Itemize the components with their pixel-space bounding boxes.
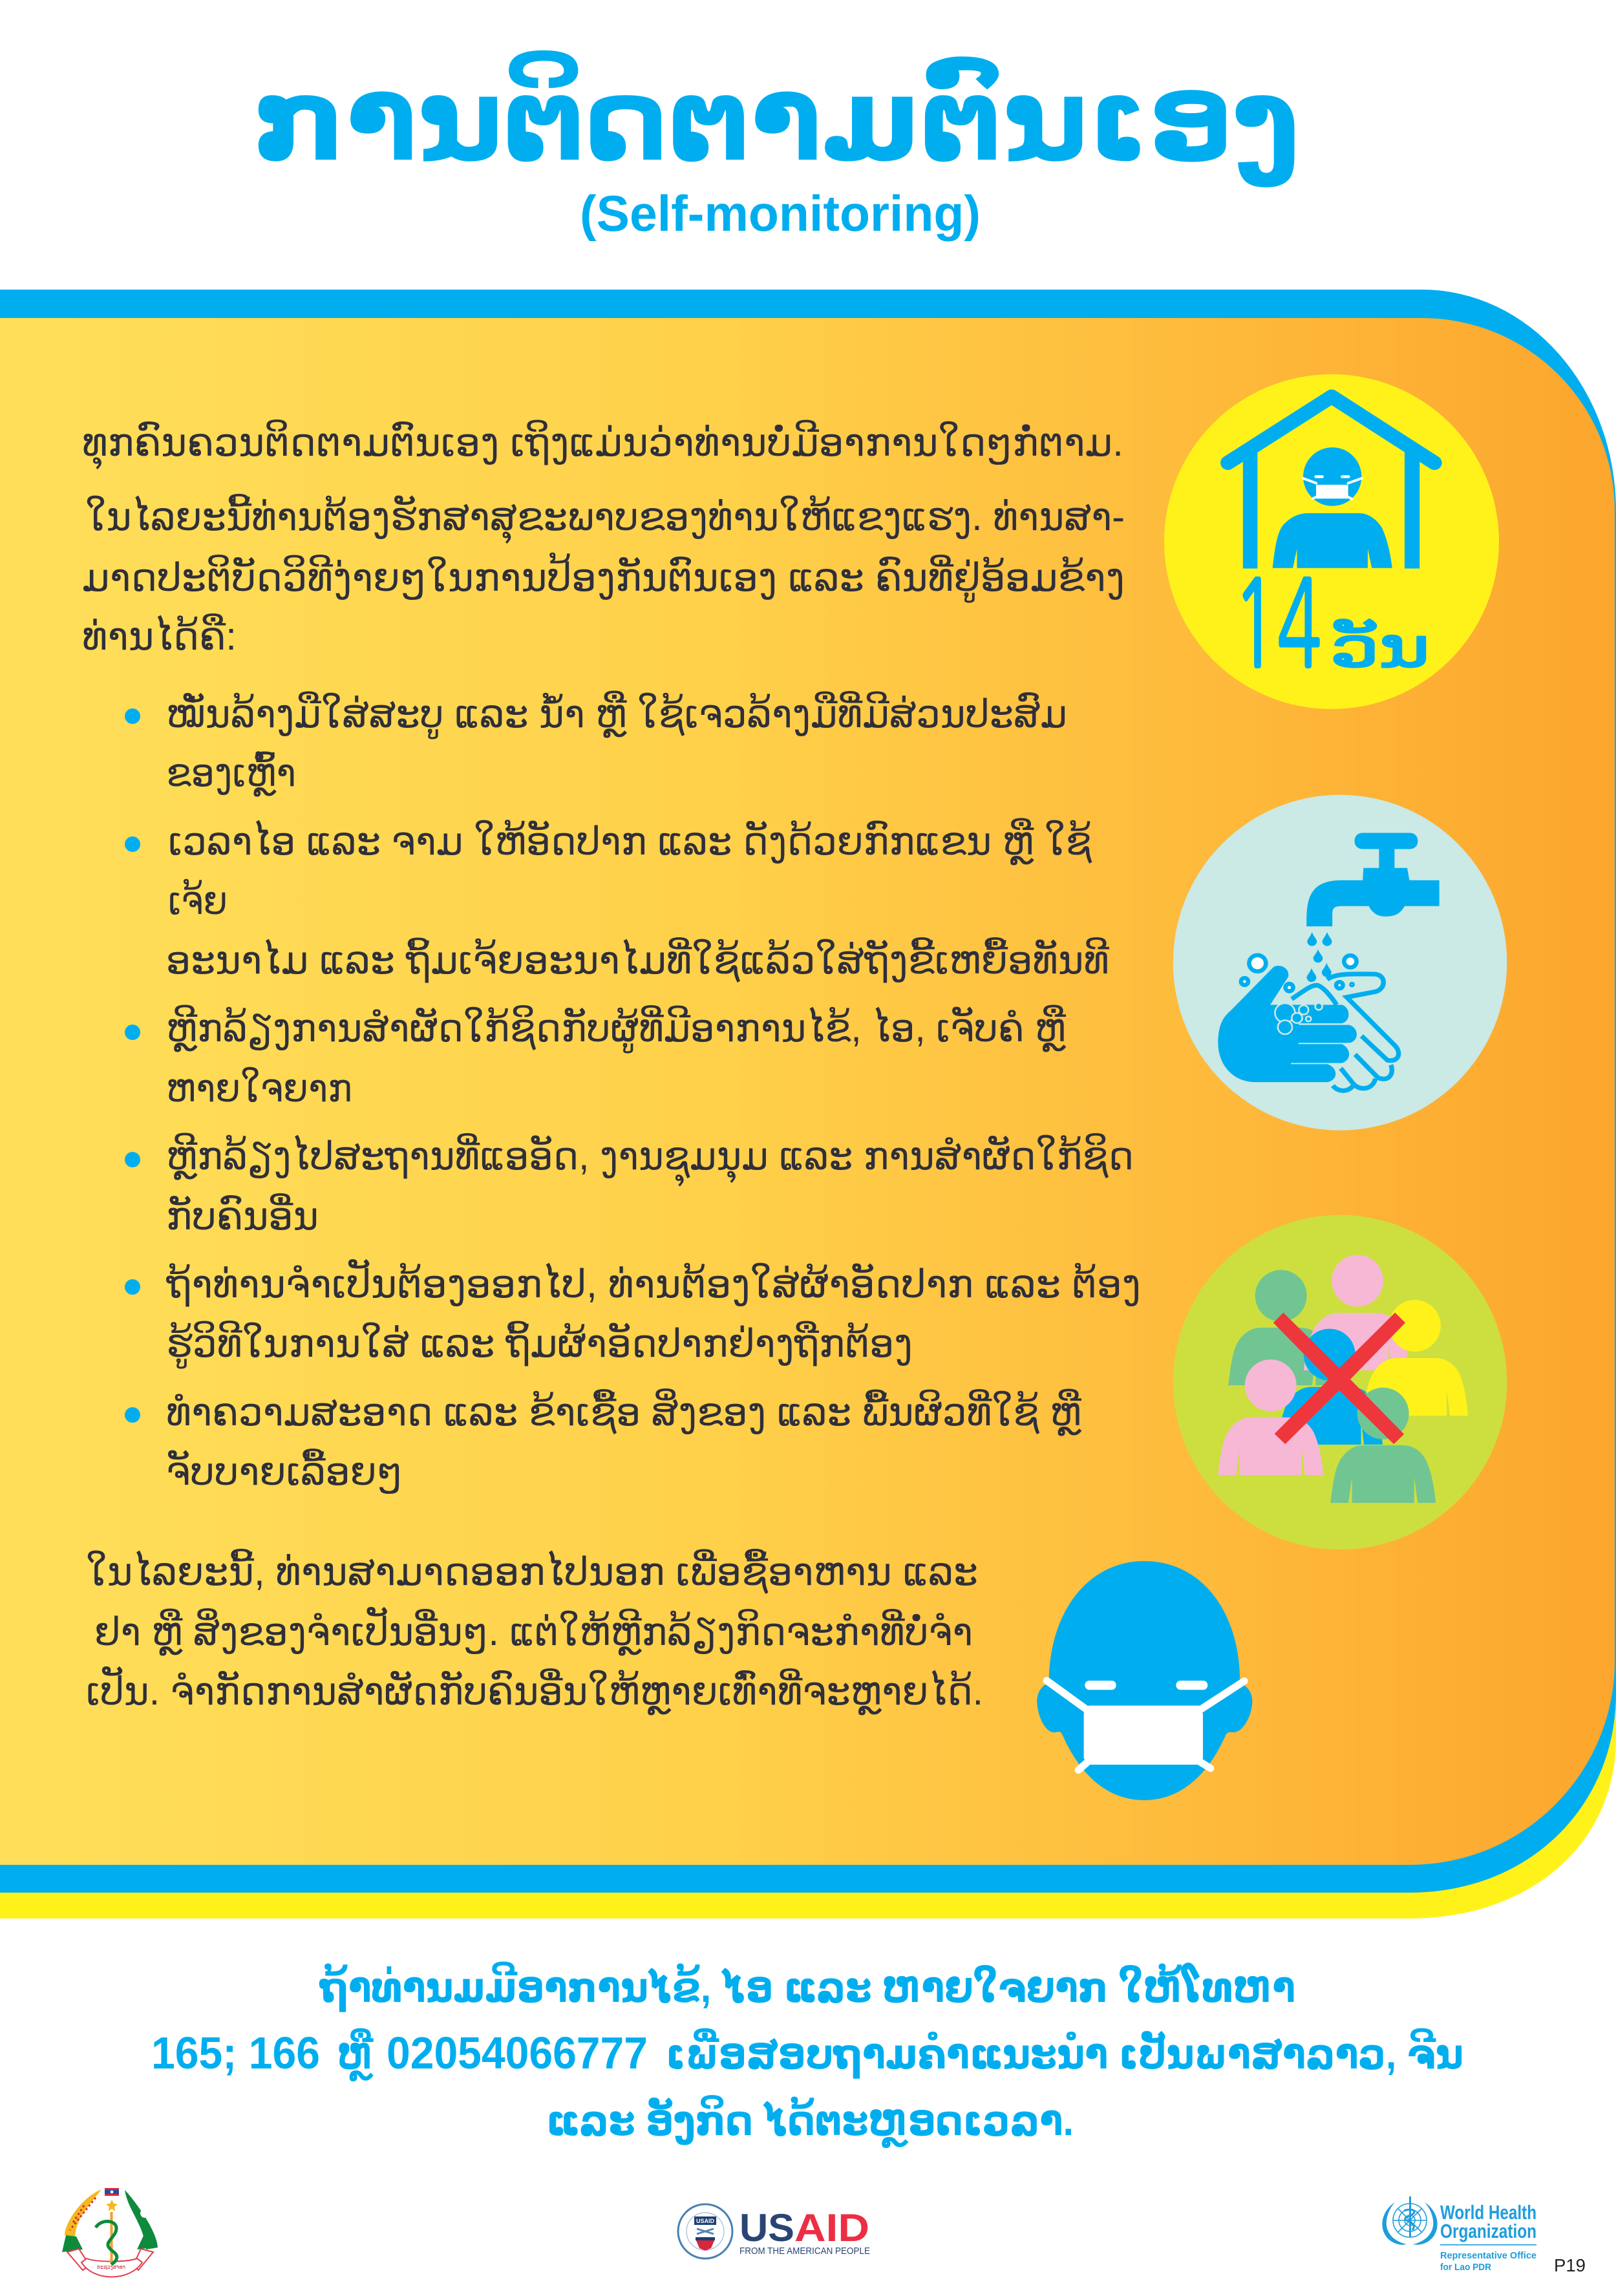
logo: Lao Ministry of Health emblem: ກະຊວງສາທາ xyxy=(97,2264,125,2271)
bullet: clean and disinfect: ຈັບບາຍເລື້ອຍໆ xyxy=(166,1448,403,1494)
icon: face with mask xyxy=(1037,1561,1252,1800)
closing paragraph: ເປັນ. ຈຳກັດການສຳຜັດກັບຄົນອື່ນໃຫ້ຫຼາຍເທົ່າທີ່ຈະຫຼາຍໄດ້. xyxy=(86,1666,983,1716)
intro text xyxy=(82,419,1125,658)
bullet: cover coughs: ອະນາໄມ ແລະ ຖິ້ມເຈ້ຍອະນາໄມທີ່ໃຊ້ແລ້ວໃສ່ຖັງຂີ້ເຫຍື້ອທັນທີ xyxy=(166,937,1109,983)
footer hotline text: ຖ້າທ່ານມມີອາການໄຂ້, ໄອ ແລະ ຫາຍໃຈຍາກ ໃຫ້ໂທຫາ xyxy=(319,1961,1295,2012)
logo: USAID: US xyxy=(739,2206,794,2249)
closing paragraph: ໃນໄລຍະນີ້, ທ່ານສາມາດອອກໄປນອກ ເພື່ອຊື້ອາຫານ ແລະ xyxy=(86,1548,978,1595)
logo: USAID: FROM THE AMERICAN PEOPLE xyxy=(739,2246,870,2257)
panel: background bands xyxy=(0,290,1616,1919)
intro text: ໃນໄລຍະນີ້ທ່ານຕ້ອງຮັກສາສຸຂະພາບຂອງທ່ານໃຫ້ແຂງແຮງ. ທ່ານສາ- xyxy=(85,493,1125,544)
subtitle: (Self-monitoring) xyxy=(580,185,981,242)
person: green back xyxy=(1228,1270,1334,1385)
footer hotline text: ແລະ ອັງກິດ ໄດ້ຕະຫຼອດເວລາ. xyxy=(546,2094,1074,2149)
bullet: wash hands: ໝັ່ນລ້າງມືໃສ່ສະບູ ແລະ ນ້ຳ ຫຼື ໃຊ້ເຈວລ້າງມືທີ່ມີສ່ວນປະສົມ xyxy=(166,690,1067,739)
logo: World Health Organization xyxy=(1382,2196,1536,2273)
icon: red cross xyxy=(1273,1313,1405,1444)
intro text: ທ່ານໄດ້ຄື: xyxy=(82,613,237,658)
page code: P19 xyxy=(1554,2255,1586,2275)
icon: avoid crowds xyxy=(1173,1215,1507,1549)
icon: stay home 14 days: ວັນ xyxy=(1330,617,1430,678)
person: blue middle xyxy=(1277,1329,1383,1445)
bullet: wash hands: ຂອງເຫຼົ້າ xyxy=(166,750,296,797)
icon: washing hands at tap xyxy=(1173,795,1507,1131)
person: yellow right xyxy=(1363,1300,1468,1416)
person: pink back xyxy=(1304,1255,1409,1370)
logo: World Health Organization: Representative Office xyxy=(1440,2250,1536,2261)
logo: Lao Ministry of Health emblem xyxy=(62,2188,158,2277)
footer hotline text: 165; 166 xyxy=(151,2028,320,2078)
bullet: wear a mask: ຮູ້ວິທີໃນການໃສ່ ແລະ ຖິ້ມຜ້າອັດປາກຢ່າງຖືກຕ້ອງ xyxy=(166,1320,913,1369)
bullet: cover coughs xyxy=(125,818,1109,983)
logo: World Health Organization: World Health xyxy=(1440,2201,1536,2224)
footer hotline text: 02054066777 xyxy=(387,2028,648,2078)
bullet: clean and disinfect xyxy=(125,1388,1082,1494)
bullet: cover coughs: ເຈ້ຍ xyxy=(168,878,228,922)
title: ການຕິດຕາມຕົນເອງ xyxy=(253,50,1300,187)
logo: USAID xyxy=(678,2204,870,2259)
person: green front xyxy=(1330,1388,1436,1503)
closing paragraph: ຢາ ຫຼື ສິ່ງຂອງຈຳເປັນອື່ນໆ. ແຕ່ໃຫ້ຫຼີກລ້ຽງກິດຈະກຳທີ່ບໍ່ຈຳ xyxy=(94,1606,973,1656)
footer hotline text: ຫຼື xyxy=(337,2027,374,2082)
person: pink front xyxy=(1218,1359,1323,1475)
bullet: avoid close contact: ຫຼີກລ້ຽງການສຳຜັດໃກ້ຊິດກັບຜູ້ທີ່ມີອາການໄຂ້, ໄອ, ເຈັບຄໍ ຫຼື xyxy=(166,1004,1067,1054)
bullet: avoid crowds: ກັບຄົນອື່ນ xyxy=(166,1193,319,1238)
logo: USAID: USAID xyxy=(696,2218,715,2224)
icon: stay home 14 days xyxy=(1164,374,1499,709)
intro text: ມາດປະຕິບັດວິທີງ່າຍໆໃນການປ້ອງກັນຕົນເອງ ແລະ ຄົນທີ່ຢູ່ອ້ອມຂ້າງ xyxy=(82,552,1125,603)
bullet: wash hands xyxy=(125,690,1067,797)
bullet: avoid close contact xyxy=(125,1004,1067,1110)
bullet: wear a mask xyxy=(125,1259,1141,1369)
logo: World Health Organization: Organization xyxy=(1440,2220,1536,2242)
bullet: avoid crowds: ຫຼີກລ້ຽງໄປສະຖານທີ່ແອອັດ, ງານຊຸມນຸມ ແລະ ການສຳຜັດໃກ້ຊິດ xyxy=(166,1132,1134,1187)
footer hotline text: ເພື່ອສອບຖາມຄຳແນະນຳ ເປັນພາສາລາວ, ຈີນ xyxy=(666,2027,1463,2079)
footer hotline text xyxy=(151,1961,1463,2149)
closing paragraph xyxy=(86,1548,983,1716)
logo: USAID: AID xyxy=(794,2206,869,2249)
logo: World Health Organization: for Lao PDR xyxy=(1440,2262,1491,2273)
bullet: wear a mask: ຖ້າທ່ານຈຳເປັນຕ້ອງອອກໄປ, ທ່ານຕ້ອງໃສ່ຜ້າອັດປາກ ແລະ ຕ້ອງ xyxy=(165,1259,1141,1306)
intro text: ທຸກຄົນຄວນຕິດຕາມຕົນເອງ ເຖິງແມ່ນວ່າທ່ານບໍ່ມີອາການໃດໆກໍ່ຕາມ. xyxy=(82,419,1123,469)
bullet: cover coughs: ເວລາໄອ ແລະ ຈາມ ໃຫ້ອັດປາກ ແລະ ດັງດ້ວຍກົກແຂນ ຫຼື ໃຊ້ xyxy=(168,818,1092,866)
bullet: clean and disinfect: ທຳຄວາມສະອາດ ແລະ ຂ້າເຊື້ອ ສິ່ງຂອງ ແລະ ພື້ນຜິວທີ່ໃຊ້ ຫຼື xyxy=(166,1388,1082,1436)
icon: stay home 14 days: 14 xyxy=(1233,565,1321,684)
bullet: avoid crowds xyxy=(125,1132,1134,1238)
bullet: avoid close contact: ຫາຍໃຈຍາກ xyxy=(166,1066,352,1110)
